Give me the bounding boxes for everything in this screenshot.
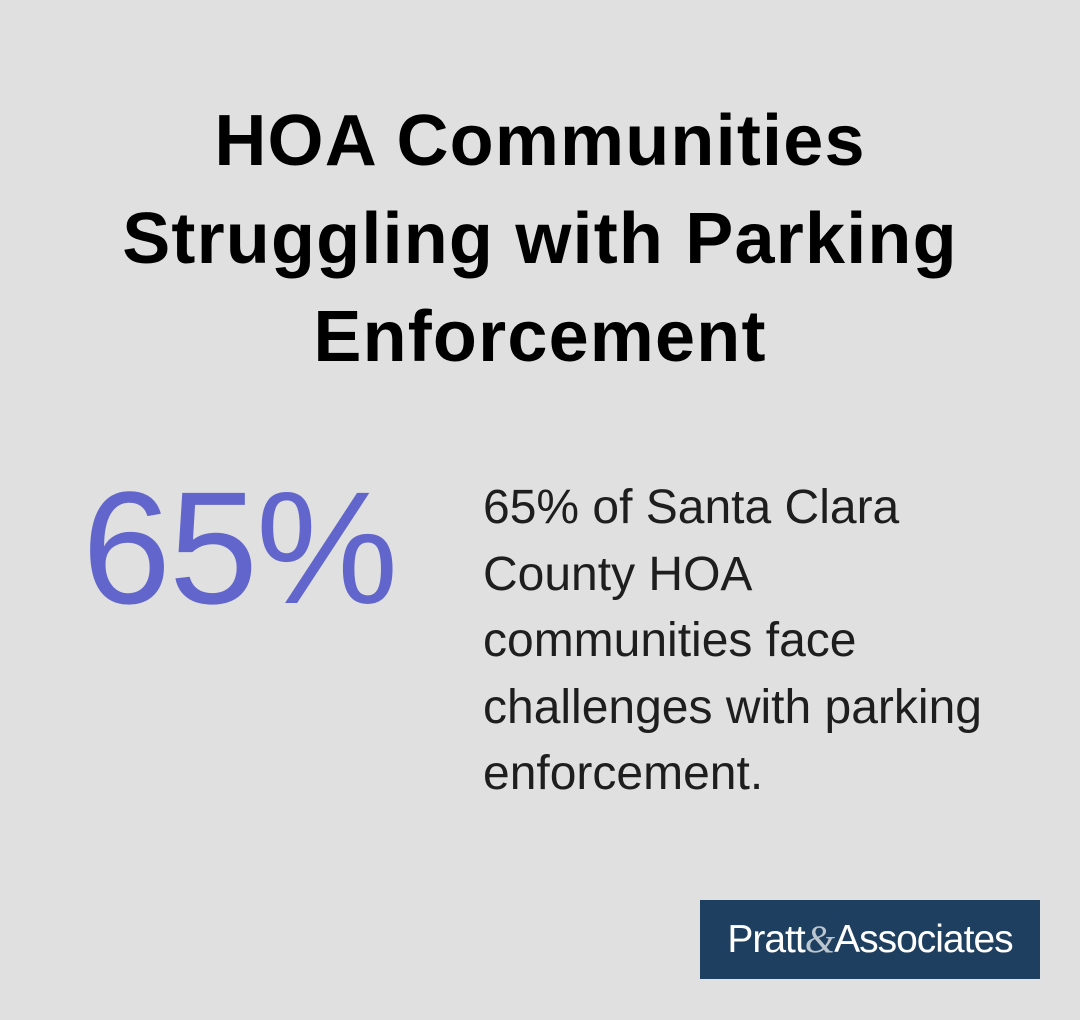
title	[122, 101, 958, 377]
title: Enforcement	[313, 297, 767, 377]
description text: communities face	[483, 614, 856, 667]
logo: Pratt&Associates	[727, 918, 1013, 961]
description text: County HOA	[483, 548, 752, 600]
big statistic: 65%	[82, 458, 396, 637]
logo	[700, 900, 1040, 979]
description text	[483, 481, 982, 800]
title: Struggling with Parking	[122, 199, 958, 279]
description text: challenges with parking	[483, 680, 982, 734]
description text: enforcement.	[483, 747, 763, 800]
description text: 65% of Santa Clara	[483, 481, 899, 534]
title: HOA Communities	[214, 101, 866, 181]
